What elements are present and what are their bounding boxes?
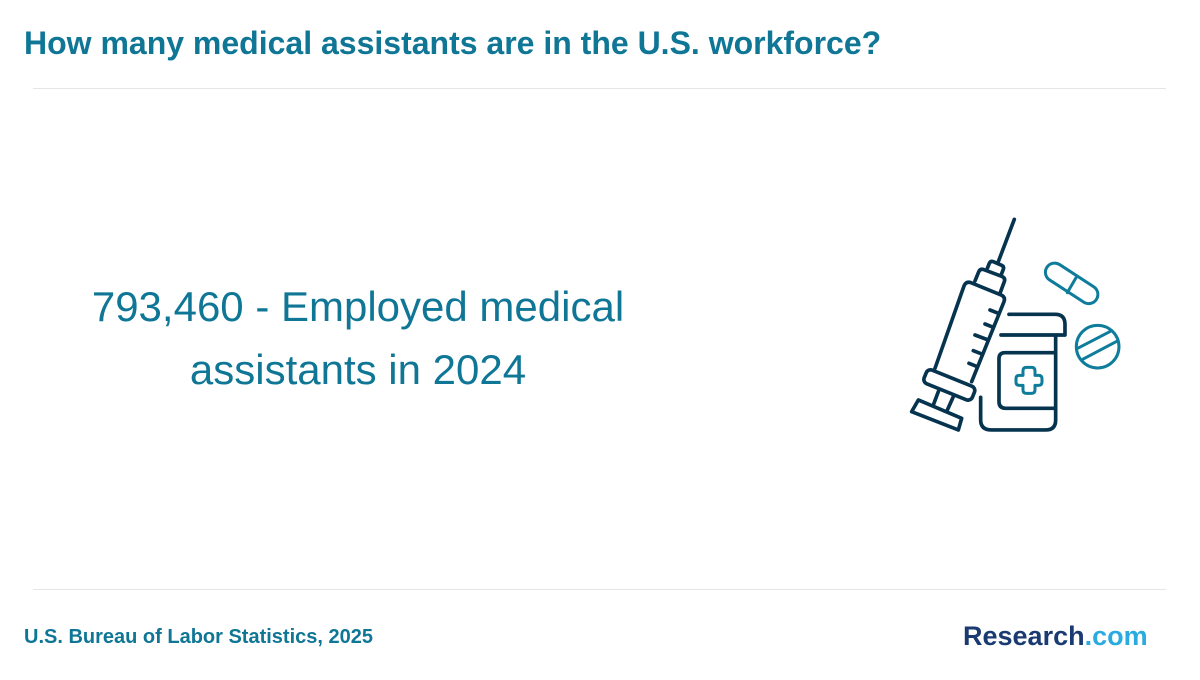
icon: syringe [912,219,1014,430]
icon: round pill [1076,325,1119,368]
logo: Research.com: Research.com [963,621,1148,651]
title: How many medical assistants are in the U.S. workforce? [24,25,881,61]
main statistic text: assistants in 2024 [190,346,526,393]
main statistic text [92,283,624,393]
main statistic text: 793,460 - Employed medical [92,283,624,330]
source text: U.S. Bureau of Labor Statistics, 2025 [24,626,373,648]
icon: medicine bottle [981,314,1065,430]
icon: capsule pill [1042,260,1101,307]
